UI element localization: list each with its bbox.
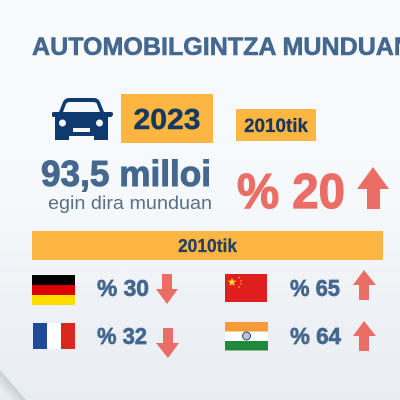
arrow: down [156,274,178,304]
arrow: large up [357,167,389,209]
year badge: 2023: 2023 [134,104,200,136]
row: Germany [32,274,178,305]
header bar: 2010tik [32,231,383,260]
row: France [33,323,179,358]
flag: India [225,322,268,350]
flag: France [33,323,75,349]
badge: 2010tik: 2010tik [244,116,308,137]
icon: car [52,98,113,140]
year badge: 2023 [121,94,213,143]
flag: China [225,274,267,302]
flag: Germany [32,275,75,305]
stat: 93,5 milloi: 93,5 milloi [41,153,211,194]
value: % 65: % 65 [290,275,340,301]
arrow: up [353,321,376,351]
value: % 32: % 32 [97,323,147,349]
stat: % 20: % 20 [237,165,345,219]
value: % 30: % 30 [97,275,149,301]
badge: 2010tik [236,109,316,141]
arrow: down [156,328,179,358]
header bar: 2010tik: 2010tik [178,236,238,256]
row: India [225,321,376,351]
caption: egin dira munduan [48,193,212,213]
arrow: up [353,270,376,300]
value: % 64: % 64 [290,323,341,349]
title: AUTOMOBILGINTZA MUNDUAN [32,33,400,61]
row: China [225,270,376,302]
